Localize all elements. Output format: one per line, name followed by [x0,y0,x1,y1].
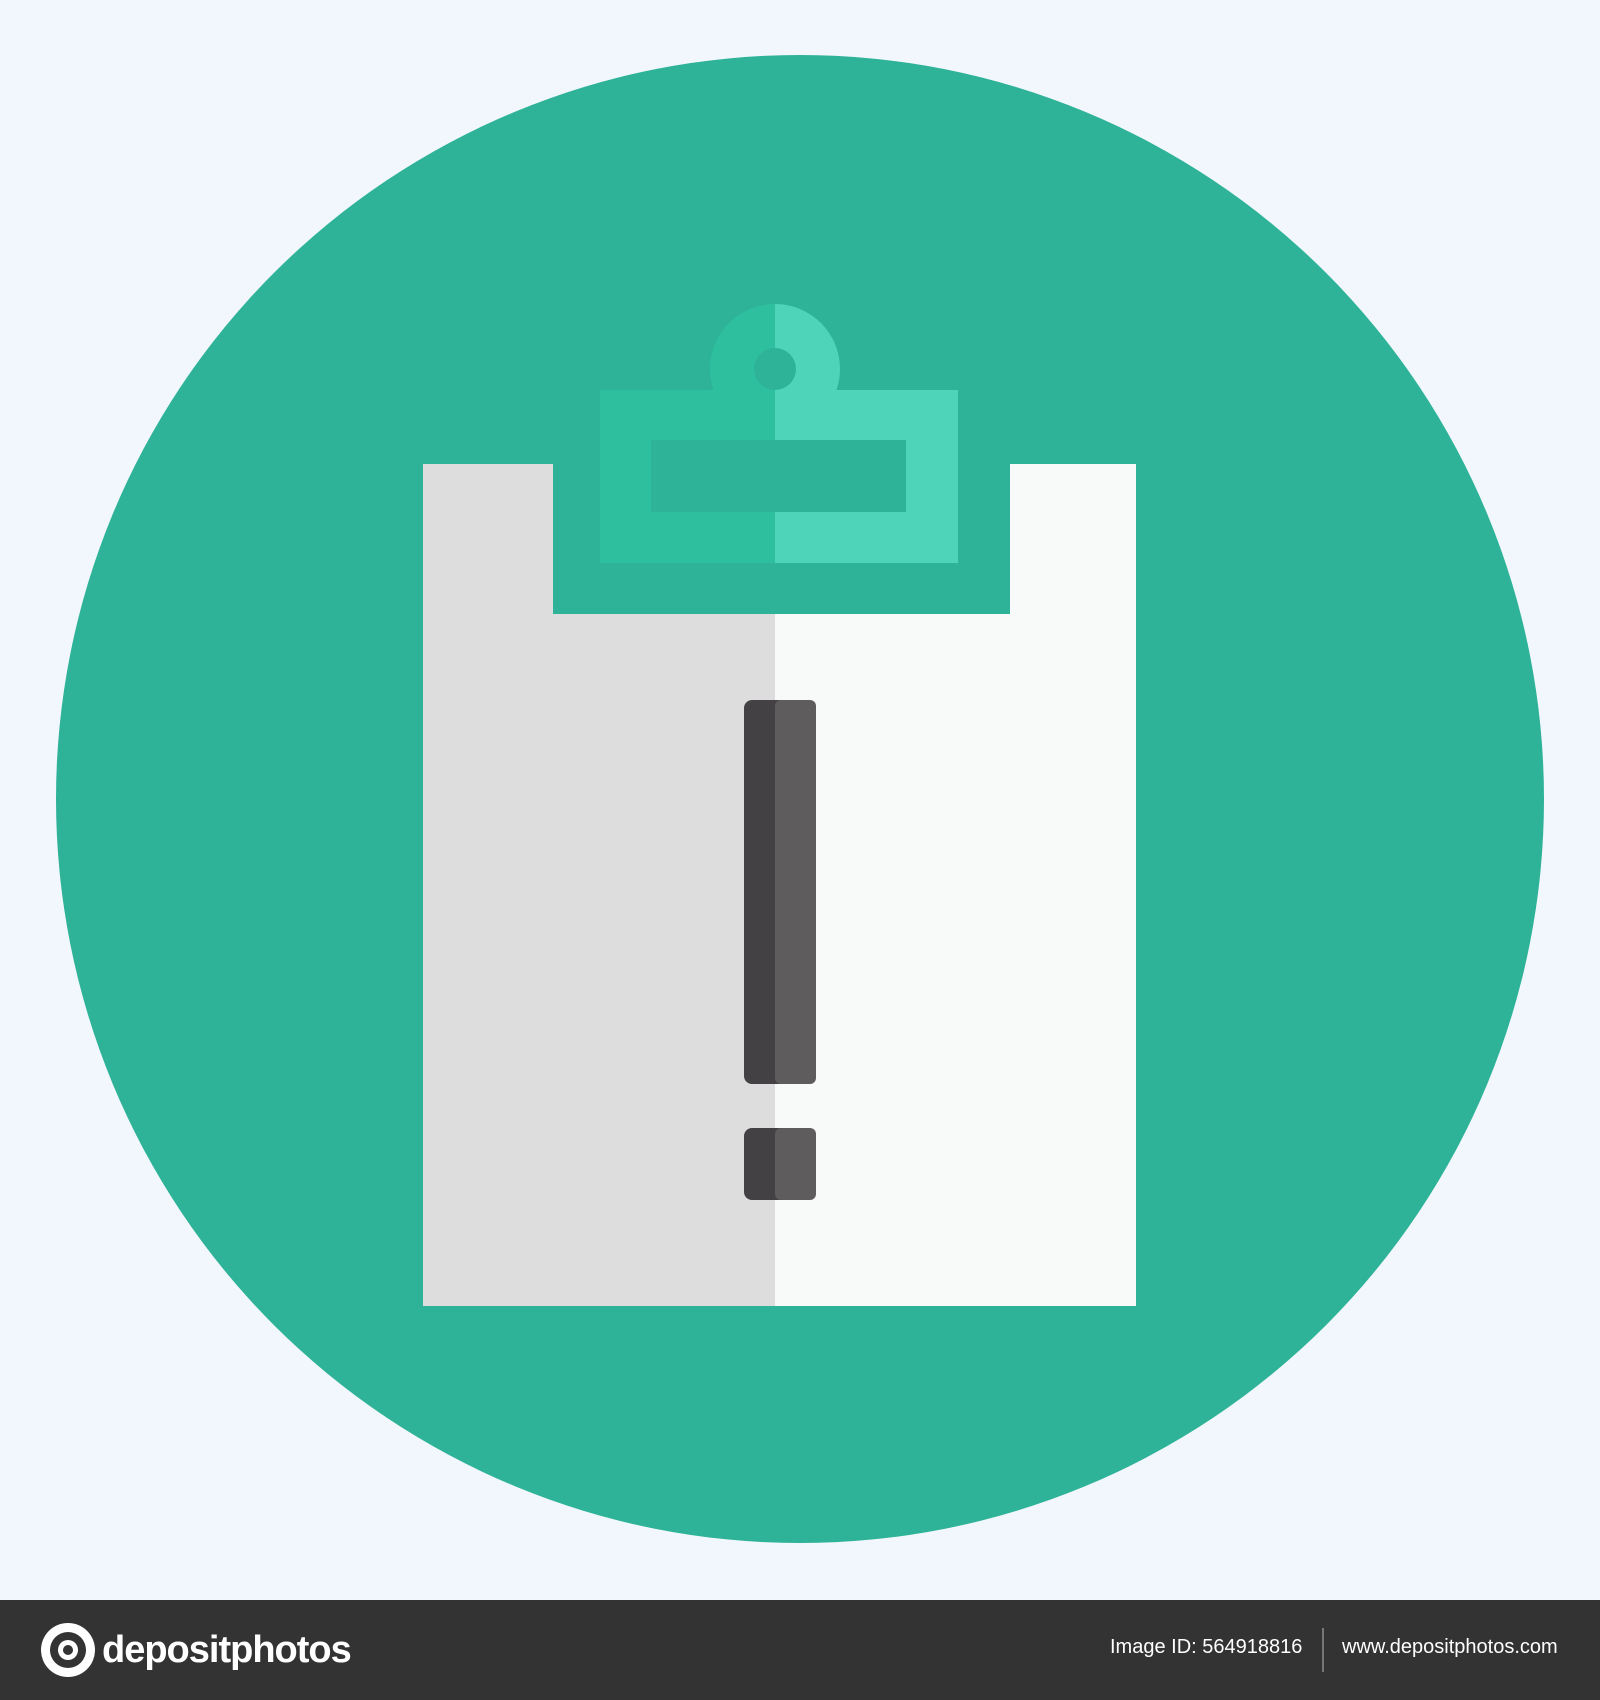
clipboard paper [423,464,1136,1306]
logo: depositphotos [102,1628,351,1670]
image id: Image ID: 564918816 [1110,1636,1302,1658]
clip [600,304,958,563]
website: www.depositphotos.com [1342,1636,1558,1658]
exclamation mark [744,700,816,1200]
footer bar [0,1600,1600,1700]
logo [41,1623,351,1677]
